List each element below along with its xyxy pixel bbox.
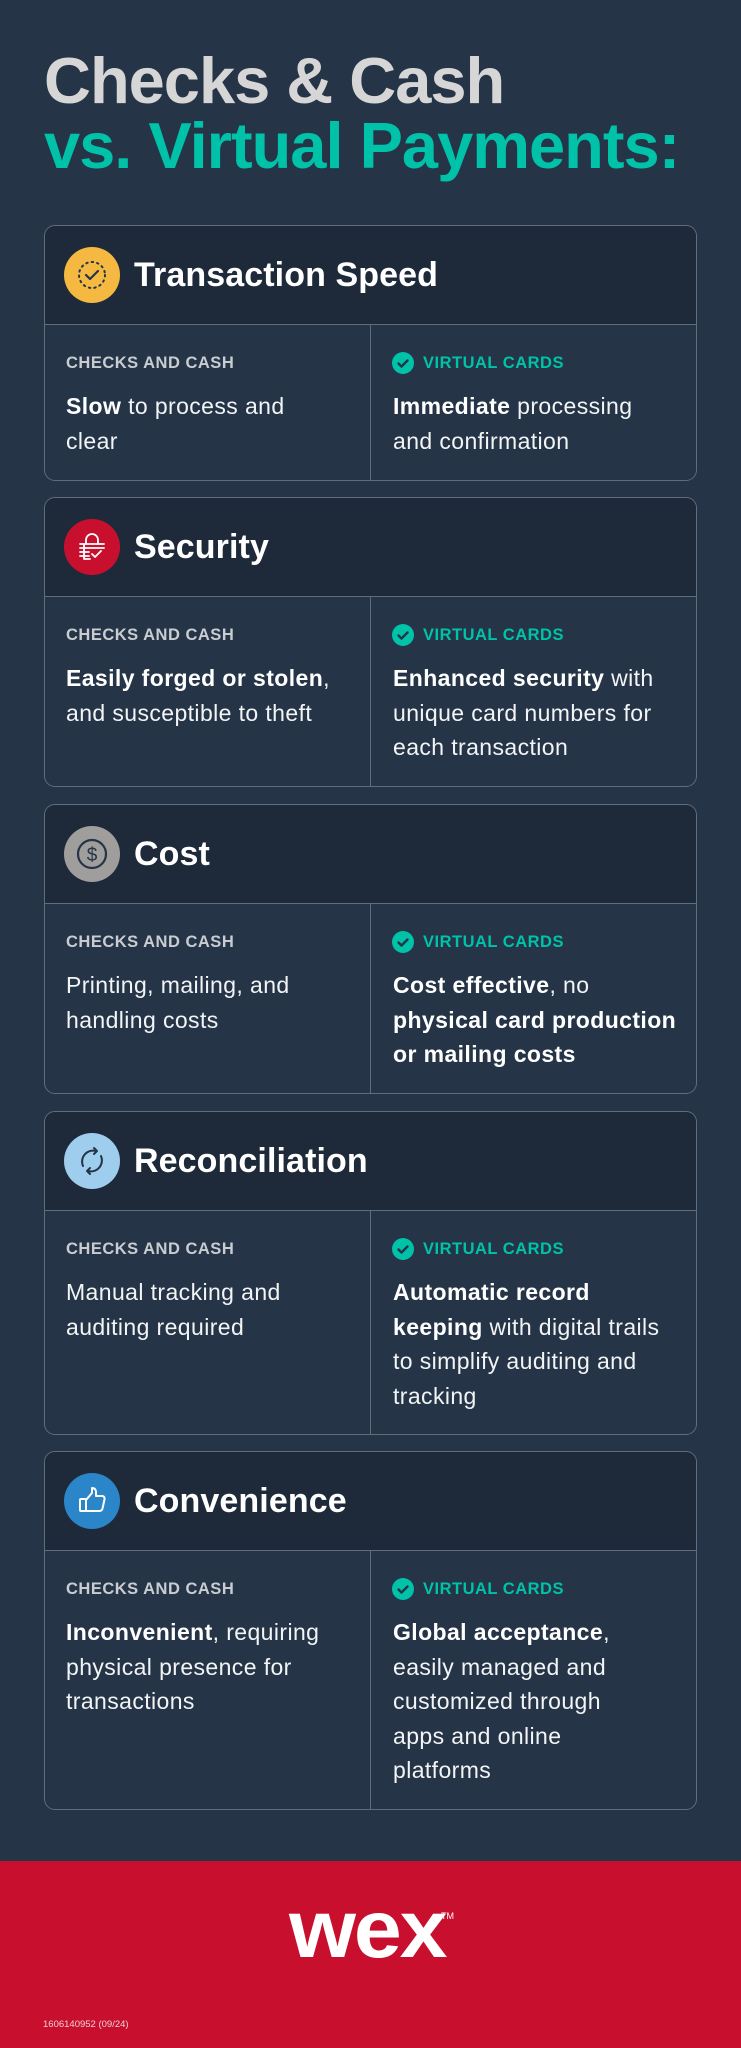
header: cost [45,805,696,904]
heading: Transaction Speed [134,256,438,294]
column: virtual cards [392,624,654,760]
column: virtual cards: customized through [393,1688,601,1714]
column: checks and cash: Manual tracking and [66,1279,281,1305]
column: virtual cards: each transaction [393,734,568,760]
column: virtual cards: physical card production [393,1006,676,1032]
column: virtual cards: easily managed and [393,1654,606,1680]
icon: lock [64,519,120,575]
column: checks and cash: Printing, mailing, and [66,972,290,998]
column: virtual cards: or mailing costs [393,1041,576,1067]
header: transaction speed [45,226,696,325]
column: virtual cards [392,1238,659,1409]
column: virtual cards: keeping with digital trails [393,1314,659,1340]
column: checks and cash: Slow to process and [66,393,285,419]
title line 1: Checks & Cash [44,44,504,117]
panel: cost [44,804,697,1094]
column: checks and cash: CHECKS AND CASH [66,1580,234,1598]
panel: security [44,497,697,787]
column: checks and cash: handling costs [66,1006,219,1032]
column: checks and cash: CHECKS AND CASH [66,626,234,644]
column: checks and cash [45,325,371,480]
column: virtual cards: platforms [393,1757,491,1783]
column: checks and cash: clear [66,428,118,454]
column: checks and cash: CHECKS AND CASH [66,354,234,372]
column: checks and cash [45,904,371,1093]
icon: dollar: $ [87,845,98,866]
column: virtual cards [392,1578,610,1783]
column: virtual cards: Immediate processing [393,393,632,419]
logo: wex: wex [289,1884,445,1975]
panel: transaction speed [44,225,697,481]
column: virtual cards: VIRTUAL CARDS [423,626,564,644]
logo: wex: TM [441,1911,454,1921]
header: convenience [45,1452,696,1551]
column: checks and cash: transactions [66,1688,195,1714]
panel: reconciliation [44,1111,697,1435]
column: checks and cash: Inconvenient, requiring [66,1619,319,1645]
column: virtual cards: tracking [393,1382,477,1408]
heading: Security [134,528,269,566]
column: virtual cards: Cost effective, no [393,972,589,998]
footer [0,1861,741,2048]
icon: thumbs up [64,1473,120,1529]
heading: Convenience [134,1482,347,1520]
column: virtual cards: VIRTUAL CARDS [423,1580,564,1598]
panel: convenience [44,1451,697,1810]
code text: 1606140952 (09/24) [43,2019,129,2030]
icon: dollar [64,826,120,882]
column: virtual cards: apps and online [393,1722,561,1748]
column: checks and cash: CHECKS AND CASH [66,933,234,951]
column: virtual cards: VIRTUAL CARDS [423,1240,564,1258]
column: virtual cards: and confirmation [393,428,569,454]
column: virtual cards: VIRTUAL CARDS [423,354,564,372]
column: checks and cash [45,597,371,786]
column: checks and cash [45,1551,371,1809]
column: checks and cash [45,1211,371,1434]
column: virtual cards: VIRTUAL CARDS [423,933,564,951]
heading: Reconciliation [134,1142,368,1180]
heading: Cost [134,835,210,873]
header: security [45,498,696,597]
column: virtual cards: to simplify auditing and [393,1348,637,1374]
column: virtual cards [392,931,676,1067]
column: checks and cash: and susceptible to theft [66,700,312,726]
column: checks and cash: physical presence for [66,1654,292,1680]
column: virtual cards: Enhanced security with [393,665,654,691]
icon: clock check [64,247,120,303]
column: virtual cards [392,352,632,454]
column: checks and cash: auditing required [66,1314,244,1340]
column: checks and cash: CHECKS AND CASH [66,1240,234,1258]
icon: sync arrows [64,1133,120,1189]
column: virtual cards: Global acceptance, [393,1619,610,1645]
header: reconciliation [45,1112,696,1211]
column: virtual cards: unique card numbers for [393,700,652,726]
column: virtual cards: Automatic record [393,1279,590,1305]
column: checks and cash: Easily forged or stolen, [66,665,330,691]
title line 2: vs. Virtual Payments: [44,109,679,182]
